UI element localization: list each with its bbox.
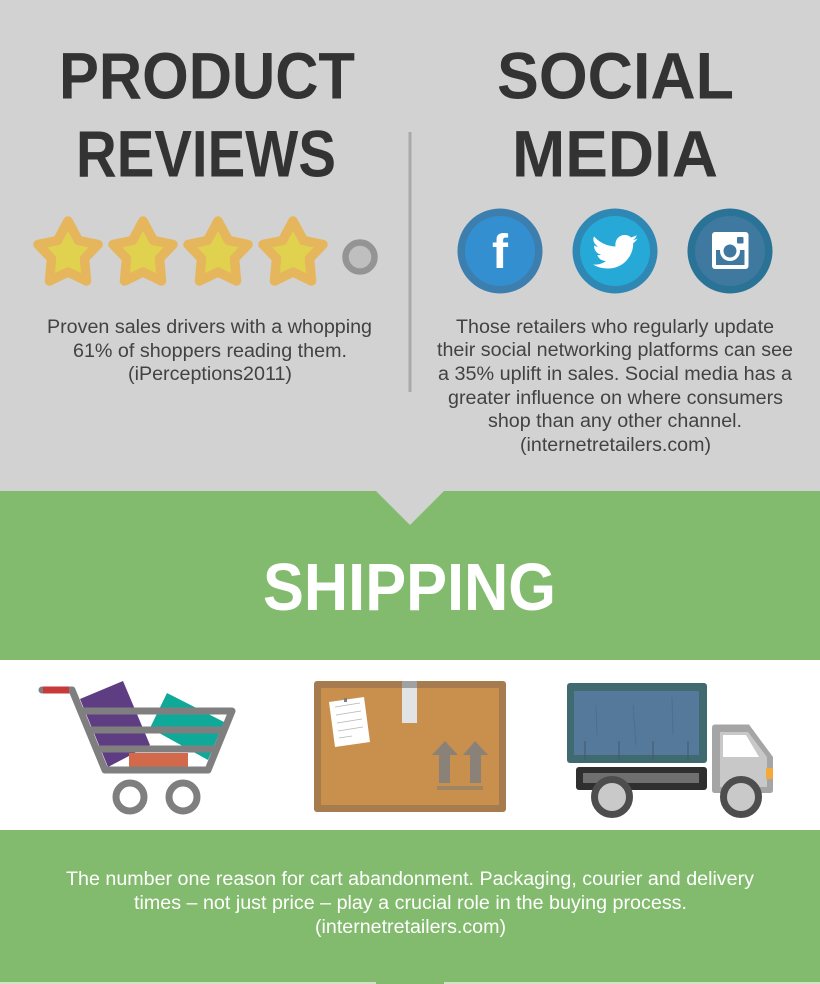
- icon: facebook: [458, 208, 542, 294]
- text block: social media: Those retailers who regularly update: [456, 316, 774, 338]
- heading: shipping: SHIPPING: [263, 550, 556, 625]
- text block: shipping: (internetretailers.com): [315, 916, 506, 938]
- heading: product reviews: PRODUCT: [59, 38, 355, 112]
- text block: social media: a 35% uplift in sales. Social media has a: [438, 363, 792, 385]
- panel: grey top background: [0, 0, 820, 491]
- icon: cardboard box: [314, 681, 506, 812]
- text block: social media: greater influence on where consumers: [448, 387, 783, 409]
- text block: product reviews: 61% of shoppers reading them.: [73, 340, 347, 362]
- text block: shipping: The number one reason for cart abandonment. Packaging, courier and delivery: [66, 868, 754, 890]
- heading: product reviews: [59, 38, 355, 190]
- icon: instagram: [688, 208, 772, 294]
- star rating icons: [38, 221, 374, 281]
- text block: shipping: times – not just price – play a crucial role in the buying process.: [134, 892, 687, 914]
- text block: social media: [437, 316, 793, 456]
- text block: product reviews: Proven sales drivers with a whopping: [47, 316, 372, 338]
- icon: twitter: [572, 208, 658, 294]
- heading: social media: SOCIAL: [497, 38, 734, 112]
- text block: product reviews: [47, 316, 372, 385]
- heading: product reviews: REVIEWS: [76, 116, 336, 190]
- text block: social media: shop than any other channel.: [488, 410, 742, 432]
- text block: social media: (internetretailers.com): [520, 434, 711, 456]
- heading: social media: [497, 38, 734, 190]
- text block: product reviews: (iPerceptions2011): [128, 363, 292, 385]
- icon: shopping cart: [42, 681, 232, 811]
- heading: social media: MEDIA: [512, 116, 718, 190]
- panel: shipping green footer: [0, 830, 820, 984]
- panel: shipping green header: [0, 491, 820, 660]
- text block: social media: their social networking platforms can see: [437, 339, 793, 361]
- icon: delivery truck: [567, 683, 773, 814]
- divider line: [408, 132, 412, 392]
- text block: shipping: [66, 868, 754, 938]
- icon: facebook: f: [492, 226, 509, 279]
